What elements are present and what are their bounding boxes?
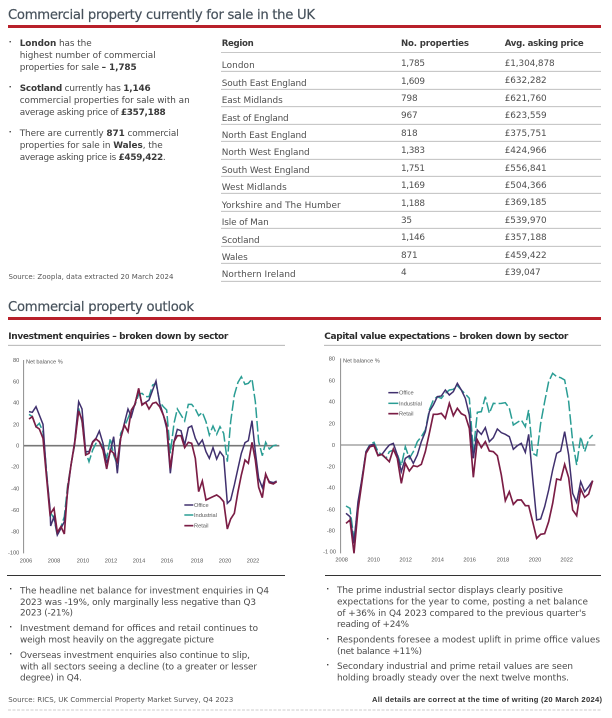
bullets: investment enquiries: weigh most heavily on the aggregate picture — [20, 635, 214, 645]
table: properties by region: Isle of Man — [222, 218, 269, 228]
key facts bullets: properties for sale in Wales, the — [20, 141, 163, 151]
line chart: capital value expectations: -1 00 — [323, 550, 336, 556]
line chart: investment enquiries: 80 — [13, 358, 19, 364]
table: properties by region: 35 — [401, 216, 412, 226]
table: properties by region: 871 — [401, 251, 418, 261]
table: properties by region: £459,422 — [505, 251, 547, 261]
line chart: capital value expectations: Retail — [399, 412, 413, 418]
line chart: investment enquiries: 2006 — [20, 559, 32, 565]
line chart: investment enquiries: Net balance % — [26, 360, 63, 366]
heading: investment enquiries: Investment enquiries – broken down by sector — [8, 332, 229, 342]
line chart: capital value expectations: 2012 — [399, 557, 412, 563]
table: properties by region: Yorkshire and The Humber — [221, 201, 341, 211]
table: properties by region: 967 — [401, 111, 418, 121]
bullets: capital value expectations: The prime industrial sector displays clearly positive — [336, 586, 563, 596]
table: properties by region: Scotland — [222, 236, 260, 246]
line chart: investment enquiries: -20 — [11, 465, 19, 471]
table: properties by region: 798 — [401, 94, 418, 104]
bullets: investment enquiries: The headline net balance for investment enquiries in Q4 — [19, 586, 269, 596]
bullets: investment enquiries: 2023 (-21%) — [20, 609, 73, 619]
table: properties by region: East of England — [222, 114, 289, 124]
key facts bullets: There are currently 871 commercial — [19, 129, 179, 139]
bullets: capital value expectations: holding broadly steady over the next twelve months. — [337, 674, 569, 684]
line chart: investment enquiries: 2010 — [77, 559, 89, 565]
line chart: capital value expectations: 20 — [329, 422, 335, 428]
table: properties by region: Avg. asking price — [505, 39, 584, 49]
table: properties by region: North West England — [222, 148, 310, 158]
key facts bullets: average asking price of £357,188 — [20, 108, 166, 118]
bullets: investment enquiries: with all sectors seeing a decline (to a greater or lesser — [20, 663, 257, 673]
heading: capital value expectations: Capital value expectations – broken down by sector — [324, 332, 569, 342]
table: properties by region: Northern Ireland — [222, 270, 296, 280]
table: properties by region: 1,383 — [401, 146, 425, 156]
line chart: investment enquiries — [8, 358, 279, 565]
line chart: investment enquiries: -60 — [11, 508, 19, 514]
source: RICS: Source: RICS, UK Commercial Property Market Survey, Q4 2023 — [8, 696, 233, 704]
line chart: capital value expectations: 2008 — [335, 557, 348, 563]
table: properties by region: £621,760 — [505, 94, 547, 104]
table: properties by region: London — [222, 61, 255, 71]
line chart: investment enquiries: 0 — [16, 444, 19, 450]
line chart: investment enquiries: 60 — [13, 380, 19, 386]
line chart: investment enquiries: 2014 — [133, 559, 145, 565]
source: Zoopla: Source: Zoopla, data extracted 20 March 2024 — [8, 273, 174, 281]
line chart: capital value expectations: Net balance % — [343, 359, 380, 365]
line chart: capital value expectations: -60 — [327, 507, 335, 513]
line chart: capital value expectations: -80 — [327, 529, 335, 535]
line chart: investment enquiries: Office — [194, 503, 209, 509]
bullets: investment enquiries: Overseas investment enquiries also continue to slip, — [20, 651, 250, 661]
line chart: investment enquiries: 2020 — [219, 559, 231, 565]
table: properties by region: 4 — [401, 268, 407, 278]
bullets: capital value expectations: (net balance +11%) — [337, 647, 422, 657]
line chart: investment enquiries: 20 — [13, 422, 19, 428]
key facts bullets: average asking price is £459,422. — [20, 153, 166, 163]
title: commercial property outlook: Commercial property outlook — [8, 300, 194, 315]
line chart: capital value expectations: 2014 — [431, 557, 444, 563]
table: properties by region — [221, 39, 601, 281]
table: properties by region: £424,966 — [505, 146, 547, 156]
table: properties by region: £1,304,878 — [505, 59, 555, 69]
line chart: capital value expectations: 2018 — [497, 557, 509, 563]
line chart: capital value expectations: 2010 — [367, 557, 380, 563]
table: properties by region: Wales — [222, 253, 248, 263]
bullets: investment enquiries: Investment demand for offices and retail continues to — [20, 624, 258, 634]
line chart: capital value expectations: 80 — [329, 356, 335, 362]
table: properties by region: 1,785 — [401, 59, 425, 69]
line chart: capital value expectations: -20 — [327, 464, 335, 470]
line chart: capital value expectations: 40 — [329, 400, 335, 406]
line chart: investment enquiries: -80 — [11, 530, 19, 536]
table: properties by region: £632,282 — [505, 76, 547, 86]
table: properties by region: 1,146 — [401, 233, 425, 243]
bullets: capital value expectations: reading of +24% — [337, 620, 409, 630]
table: properties by region: 818 — [401, 129, 418, 139]
table: properties by region: North East England — [222, 131, 307, 141]
line chart: capital value expectations: 2020 — [529, 557, 541, 563]
key facts bullets: properties for sale – 1,785 — [20, 63, 137, 73]
title: commercial property for sale — [8, 8, 601, 28]
table: properties by region: £556,841 — [505, 164, 547, 174]
table: properties by region: £504,366 — [505, 181, 547, 191]
key facts bullets — [10, 39, 190, 163]
table: properties by region: £369,185 — [505, 198, 547, 208]
key facts bullets: Scotland currently has 1,146 — [20, 84, 151, 94]
line chart: investment enquiries: 2012 — [105, 559, 117, 565]
table: properties by region: 1,169 — [401, 181, 425, 191]
line chart: capital value expectations — [323, 356, 595, 563]
line chart: capital value expectations: Industrial — [399, 401, 422, 407]
table: properties by region: South East England — [222, 79, 307, 89]
table: properties by region: Region — [222, 39, 254, 49]
bullets: capital value expectations: Secondary industrial and prime retail values are seen — [337, 662, 573, 672]
table: properties by region: £39,047 — [505, 268, 541, 278]
line chart: investment enquiries: Retail — [194, 524, 208, 530]
line chart: investment enquiries: 2008 — [48, 559, 60, 565]
bullets: investment enquiries: 2023 was -19%, only marginally less negative than Q3 — [20, 598, 256, 608]
line chart: investment enquiries: 2022 — [247, 559, 259, 565]
key facts bullets: highest number of commercial — [20, 51, 156, 61]
table: properties by region: £623,559 — [505, 111, 547, 121]
bullets: capital value expectations: of +36% in Q4 2023 compared to the previous quarter's — [337, 609, 586, 619]
line chart: investment enquiries: 40 — [13, 401, 19, 407]
bullets: investment enquiries: degree) in Q4. — [20, 674, 82, 684]
line chart: capital value expectations: 2016 — [463, 557, 476, 563]
table: properties by region: 1,188 — [401, 199, 425, 209]
line chart: investment enquiries: -100 — [8, 550, 19, 556]
key facts bullets: commercial properties for sale with an — [20, 96, 190, 106]
note: correct at time of writing: All details are correct at the time of writing (20 March 2024) — [372, 695, 602, 704]
key facts bullets: London has the — [20, 39, 92, 49]
table: properties by region: No. properties — [401, 39, 469, 49]
table: properties by region: £357,188 — [505, 233, 547, 243]
line chart: capital value expectations: 0 — [332, 443, 335, 449]
line chart: investment enquiries: 2018 — [191, 559, 203, 565]
bullets: investment enquiries — [7, 576, 285, 684]
table: properties by region: 1,609 — [401, 77, 425, 87]
bullets: capital value expectations: Respondents foresee a modest uplift in prime office values — [337, 636, 600, 646]
table: properties by region: West Midlands — [222, 183, 287, 193]
table: properties by region: East Midlands — [222, 96, 283, 106]
table: properties by region: £539,970 — [505, 216, 547, 226]
bullets: capital value expectations — [325, 576, 601, 684]
line chart: investment enquiries: -40 — [11, 486, 19, 492]
line chart: investment enquiries: Industrial — [194, 513, 217, 519]
line chart: investment enquiries: 2016 — [161, 559, 173, 565]
title: commercial property for sale: Commercial property currently for sale in the UK — [8, 8, 315, 23]
line chart: capital value expectations: -40 — [327, 486, 335, 492]
table: properties by region: 1,751 — [401, 164, 425, 174]
table: properties by region: South West England — [222, 166, 310, 176]
line chart: capital value expectations: 2022 — [560, 557, 573, 563]
line chart: capital value expectations: Office — [399, 391, 414, 397]
bullets: capital value expectations: expectations for the year to come, posting a net balance — [337, 598, 588, 608]
line chart: capital value expectations: 60 — [329, 379, 335, 385]
table: properties by region: £375,751 — [505, 129, 547, 139]
title: commercial property outlook — [8, 300, 601, 320]
